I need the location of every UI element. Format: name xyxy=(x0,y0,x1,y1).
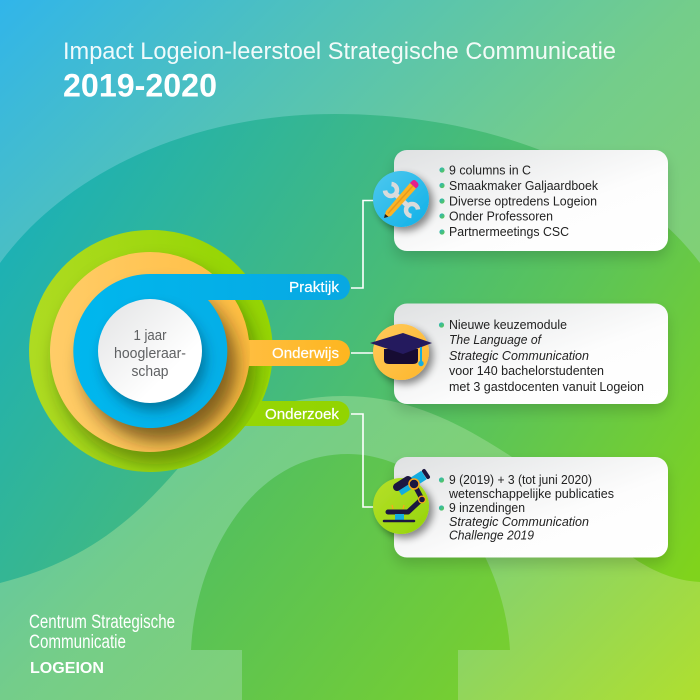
title: Impact Logeion-leerstoel Strategische Communicatie xyxy=(63,38,616,65)
list text: wetenschappelijke publicaties xyxy=(448,487,614,501)
green ring with Onderzoek pill: Onderzoek xyxy=(265,407,340,423)
footer logos: LOGEION xyxy=(30,660,104,677)
list text xyxy=(439,473,614,542)
connector lines xyxy=(351,200,376,507)
centre circle: 1 jaar xyxy=(134,328,167,344)
list text: Onder Professoren xyxy=(449,210,553,224)
panel: Praktijk xyxy=(373,150,668,251)
icon: wrench and pencil xyxy=(373,171,429,227)
icon: microscope xyxy=(373,471,429,534)
centre circle: schap xyxy=(132,364,168,380)
title: 2019-2020 xyxy=(63,68,217,104)
card background xyxy=(394,304,668,404)
list text: 9 (2019) + 3 (tot juni 2020) xyxy=(449,473,592,487)
list text: Nieuwe keuzemodule xyxy=(449,318,567,332)
panel: Onderzoek xyxy=(373,457,668,558)
list text: The Language of xyxy=(449,333,542,347)
list text: 9 inzendingen xyxy=(449,501,525,515)
background: light hill xyxy=(0,396,700,700)
list text xyxy=(439,318,644,394)
list text: Diverse optredens Logeion xyxy=(449,194,597,208)
footer logos: Communicatie xyxy=(29,632,126,653)
list text: voor 140 bachelorstudenten xyxy=(449,364,604,378)
list text: Strategic Communication xyxy=(449,515,589,529)
background: large dark arc xyxy=(0,114,700,590)
green ring with Onderzoek pill xyxy=(29,230,349,472)
concentric circle diagram xyxy=(29,230,350,472)
centre circle xyxy=(98,299,202,403)
footer logos: Centrum Strategische xyxy=(29,612,175,633)
footer logos xyxy=(29,612,175,677)
list text: Smaakmaker Galjaardboek xyxy=(449,179,599,193)
panel: Onderwijs xyxy=(370,304,668,404)
orange ring with Onderwijs pill: Onderwijs xyxy=(272,346,339,362)
list text: met 3 gastdocenten vanuit Logeion xyxy=(449,380,644,394)
card background xyxy=(394,457,668,558)
list text: 9 columns in C xyxy=(449,164,531,178)
centre circle: hoogleraar- xyxy=(114,346,186,362)
card background xyxy=(394,150,668,251)
list text: Partnermeetings CSC xyxy=(449,225,569,239)
list text: Strategic Communication xyxy=(449,349,589,363)
icon: graduation cap xyxy=(370,324,432,380)
background: dark dome silhouette xyxy=(191,454,510,700)
orange ring with Onderwijs pill xyxy=(50,252,350,452)
list text xyxy=(439,164,599,239)
title xyxy=(63,38,616,104)
blue ring with Praktijk pill: Praktijk xyxy=(289,280,340,296)
blue ring with Praktijk pill xyxy=(73,274,350,428)
list text: Challenge 2019 xyxy=(449,528,534,542)
